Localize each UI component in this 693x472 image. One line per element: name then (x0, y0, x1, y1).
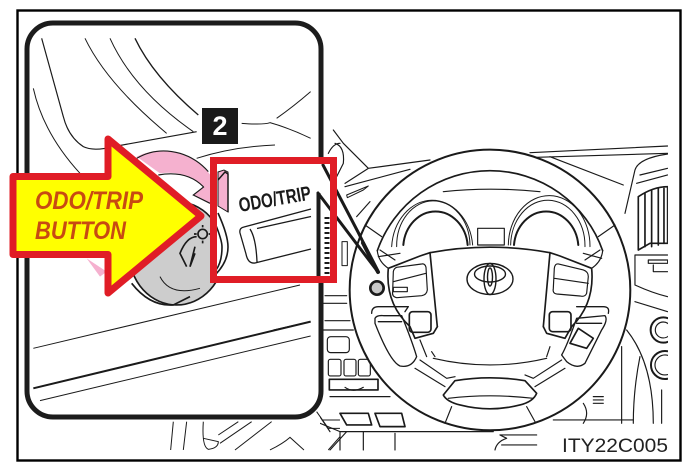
button outline (240, 209, 311, 263)
panel: highlighted button close-up (213, 160, 334, 280)
icon: lower dash buttons (320, 337, 405, 450)
gauges (403, 211, 468, 245)
icon: Toyota logo (467, 264, 513, 294)
step badge: 2: 2 (212, 111, 228, 141)
arrow label: BUTTON (35, 217, 127, 245)
text: ODO/TRIP button label: ODO/TRIP (237, 183, 313, 217)
airbag pad (430, 247, 550, 327)
highlight box around ODO/TRIP button (214, 160, 334, 280)
tick marks (324, 217, 330, 276)
wheel switches (392, 264, 427, 298)
detail: pink rotation dial (87, 151, 228, 305)
pink arrow tail (218, 170, 228, 212)
marker: ODO/TRIP button location (370, 281, 384, 295)
image code: ITY22C005 (562, 435, 668, 457)
arrow label: ODO/TRIP (35, 187, 143, 215)
dial edge arcs (215, 213, 228, 275)
panel: zoomed detail (27, 23, 321, 417)
icon: air vent (625, 154, 668, 297)
lower tick lines under panel (171, 412, 340, 450)
icon: right dash controls (495, 302, 679, 450)
lower spoke (415, 340, 565, 387)
detail line art (33, 38, 311, 401)
step badge: 2 (202, 108, 238, 144)
callout arrow: ODO/TRIP BUTTON (13, 139, 201, 293)
icon: steering wheel (350, 150, 630, 430)
illustration: dashboard and steering wheel (320, 130, 679, 450)
pointer lines to marker (318, 165, 378, 272)
panel edge inside box (316, 193, 320, 280)
